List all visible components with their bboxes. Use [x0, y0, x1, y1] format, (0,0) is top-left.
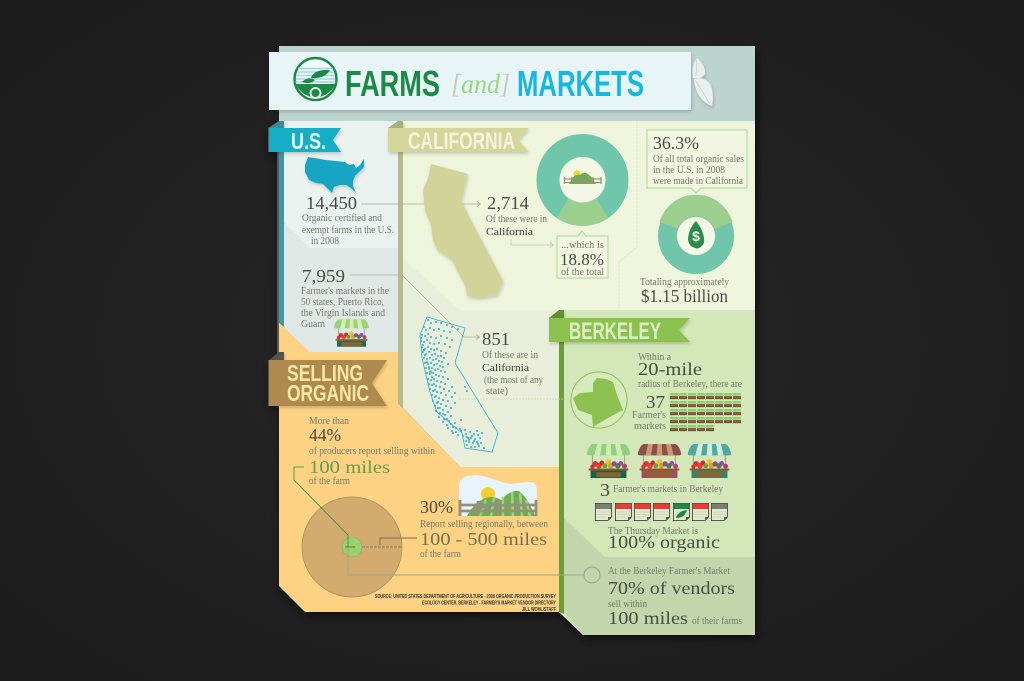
- stat: 14,450 farms: in 2008: [311, 236, 339, 247]
- panel: Berkeley background: [559, 310, 755, 635]
- icons: three market stands: [587, 444, 731, 478]
- stat: 100% organic: [608, 526, 720, 552]
- ribbon: Selling Organic: SELLING: [287, 360, 363, 386]
- stat: 70% of vendors: At the Berkeley Farmer's Market: [608, 566, 730, 577]
- source credits: [375, 594, 556, 613]
- stat: 7,959 markets: Farmer's markets in the: [301, 286, 390, 297]
- callout: 36.3%: in the U.S. in 2008: [653, 165, 725, 176]
- title text: MARKETS: [517, 63, 644, 104]
- stat: 851: state): [486, 386, 508, 397]
- stat: 20-mile radius: [638, 352, 743, 390]
- arrow: to percentage: [511, 239, 554, 248]
- stat: $1.15 billion: Totaling approximately: [640, 277, 729, 288]
- stat: 44% within 100 miles: of the farm: [309, 476, 350, 487]
- title text: FARMS: [345, 63, 440, 104]
- stat: 7,959 markets: Guam: [301, 319, 325, 330]
- stat: 37 markets: Farmer's: [632, 410, 666, 421]
- stat: 70% of vendors: 70% of vendors: [608, 578, 735, 598]
- banner plate: [269, 52, 691, 110]
- stat: 44% within 100 miles: 100 miles: [309, 457, 390, 477]
- radius diagram: [294, 467, 584, 597]
- illustration: farm scene: [459, 475, 537, 516]
- stat: 20-mile radius: 20-mile: [638, 359, 702, 379]
- stat: 851: [482, 329, 543, 397]
- stat: 70% of vendors: 100 miles: [608, 608, 688, 628]
- Berkeley section: [571, 352, 743, 628]
- ribbon: Berkeley: [549, 310, 690, 345]
- stat: 70% of vendors: of their farms: [692, 616, 742, 627]
- stat: 30% regional: of the farm: [420, 549, 461, 560]
- stat: 30% regional: 100 - 500 miles: [420, 529, 547, 549]
- callout: 18.8%: ...which is: [561, 240, 604, 251]
- stat: 3 markets in Berkeley: [600, 480, 723, 500]
- title text: [and]: [451, 69, 510, 99]
- donut chart: 18.8%: [548, 146, 617, 226]
- stat: 7,959 markets: the Virgin Islands and: [301, 308, 385, 319]
- donut chart: 36.3%: [660, 195, 732, 264]
- callout: 36.3%: 36.3%: [653, 133, 699, 153]
- stat: 37 markets: markets: [634, 421, 666, 432]
- stat: 14,450 farms: 14,450: [306, 193, 357, 213]
- poster base with panels: [268, 46, 755, 635]
- stat: 851: Of these are in: [482, 350, 538, 361]
- stat: 44% within 100 miles: More than: [309, 416, 349, 427]
- stat: 44% within 100 miles: 44%: [309, 425, 341, 445]
- stat: 30% regional: [420, 497, 548, 560]
- ribbon: California: CALIFORNIA: [408, 128, 515, 155]
- panel: California background: [398, 121, 755, 467]
- title banner: [269, 52, 713, 110]
- stat: 14,450 farms: exempt farms in the U.S.: [302, 225, 394, 236]
- stat: 2,714: Of these were in: [486, 214, 547, 225]
- ribbon: Selling Organic: ORGANIC: [287, 380, 369, 406]
- stat: 44% within 100 miles: [309, 416, 435, 487]
- icon: leaves: [692, 58, 713, 106]
- icon: market stand: [334, 319, 369, 347]
- stat: 70% of vendors: [608, 566, 742, 628]
- ribbon: U.S.: U.S.: [291, 128, 326, 154]
- stat: 100% organic: 100% organic: [608, 532, 720, 552]
- stat: $1.15 billion: [640, 277, 729, 306]
- stat: 100% organic: The Thursday Market is: [608, 526, 698, 537]
- stat: 37 markets: 37: [646, 392, 665, 412]
- source credits: SOURCE: UNITED STATES DEPARTMENT OF AGRICULTURE - 2008 ORGANIC PRODUCTION SURVEY: [375, 594, 556, 600]
- icon: California map: [423, 164, 503, 298]
- ribbon: Berkeley: BERKELEY: [569, 318, 661, 345]
- source credits: JILL WOHL/STAFF: [522, 607, 556, 613]
- California section: [420, 130, 747, 452]
- stat: 20-mile radius: Within a: [638, 352, 672, 363]
- stat: 3 markets in Berkeley: Farmer's markets in Berkeley: [613, 484, 723, 495]
- stat: 851: (the most of any: [484, 375, 543, 386]
- stat: 851: California: [482, 363, 529, 374]
- stat: 2,714: [486, 193, 547, 238]
- U.S. section: [301, 157, 480, 347]
- pictogram: 37 stands: [670, 393, 741, 431]
- stat: 851: 851: [482, 329, 510, 349]
- stat: 2,714: 2,714: [487, 193, 529, 213]
- ribbon: U.S.: [269, 121, 341, 154]
- stat: $1.15 billion: $1.15 billion: [641, 286, 728, 306]
- title text: [345, 63, 644, 104]
- top band: [279, 46, 755, 121]
- arrow: farms to California: [361, 202, 480, 206]
- stat: 7,959 markets: 7,959: [302, 266, 345, 286]
- stat: 37 markets: [632, 392, 666, 432]
- stat: 3 markets in Berkeley: 3: [600, 480, 610, 500]
- icon: US map: [305, 157, 364, 193]
- callout: 18.8%: [557, 231, 608, 278]
- stat: 30% regional: Report selling regionally, between: [420, 519, 548, 530]
- panel: Selling Organic background: [279, 323, 559, 612]
- stat: 30% regional: 30%: [420, 497, 453, 517]
- Selling Organic section: [294, 416, 584, 613]
- California divider bar: [398, 121, 403, 408]
- connector: markets to California: [350, 275, 480, 340]
- stat: 14,450 farms: Organic certified and: [302, 213, 382, 224]
- stat: 7,959 markets: 50 states, Puerto Rico,: [301, 297, 384, 308]
- icons: week calendar: [596, 504, 728, 520]
- source credits: ECOLOGY CENTER, BERKELEY - FARMER'S MARKET VENDOR DIRECTORY: [422, 600, 556, 606]
- connector circle: [584, 567, 600, 583]
- stat: 7,959 markets: [301, 266, 390, 330]
- ribbon: California: [388, 121, 529, 155]
- panel: U.S. background: [279, 121, 398, 352]
- icon: small farm: [564, 170, 601, 184]
- icon: Berkeley area map: [571, 372, 627, 428]
- callout: 18.8%: 18.8%: [560, 250, 604, 269]
- connector: California to Berkeley: [459, 398, 572, 400]
- callout: 36.3%: [647, 130, 747, 193]
- stat: 20-mile radius: radius of Berkeley, there are: [638, 379, 743, 390]
- stat: 44% within 100 miles: of producers report selling within: [309, 446, 435, 457]
- icon: dollar leaf: $: [692, 228, 700, 244]
- stat: 14,450 farms: [302, 193, 394, 247]
- map: market dots in California: [420, 317, 498, 452]
- stat: 2,714: California: [486, 227, 533, 238]
- callout: 18.8%: of the total: [561, 267, 604, 278]
- poster: [268, 46, 755, 635]
- callout: 36.3%: Of all total organic sales: [653, 154, 744, 165]
- logo: [294, 58, 336, 100]
- stat: 70% of vendors: sell within: [608, 599, 647, 610]
- ribbon: Selling Organic: [269, 352, 387, 406]
- callout: 36.3%: were made in California: [653, 176, 744, 187]
